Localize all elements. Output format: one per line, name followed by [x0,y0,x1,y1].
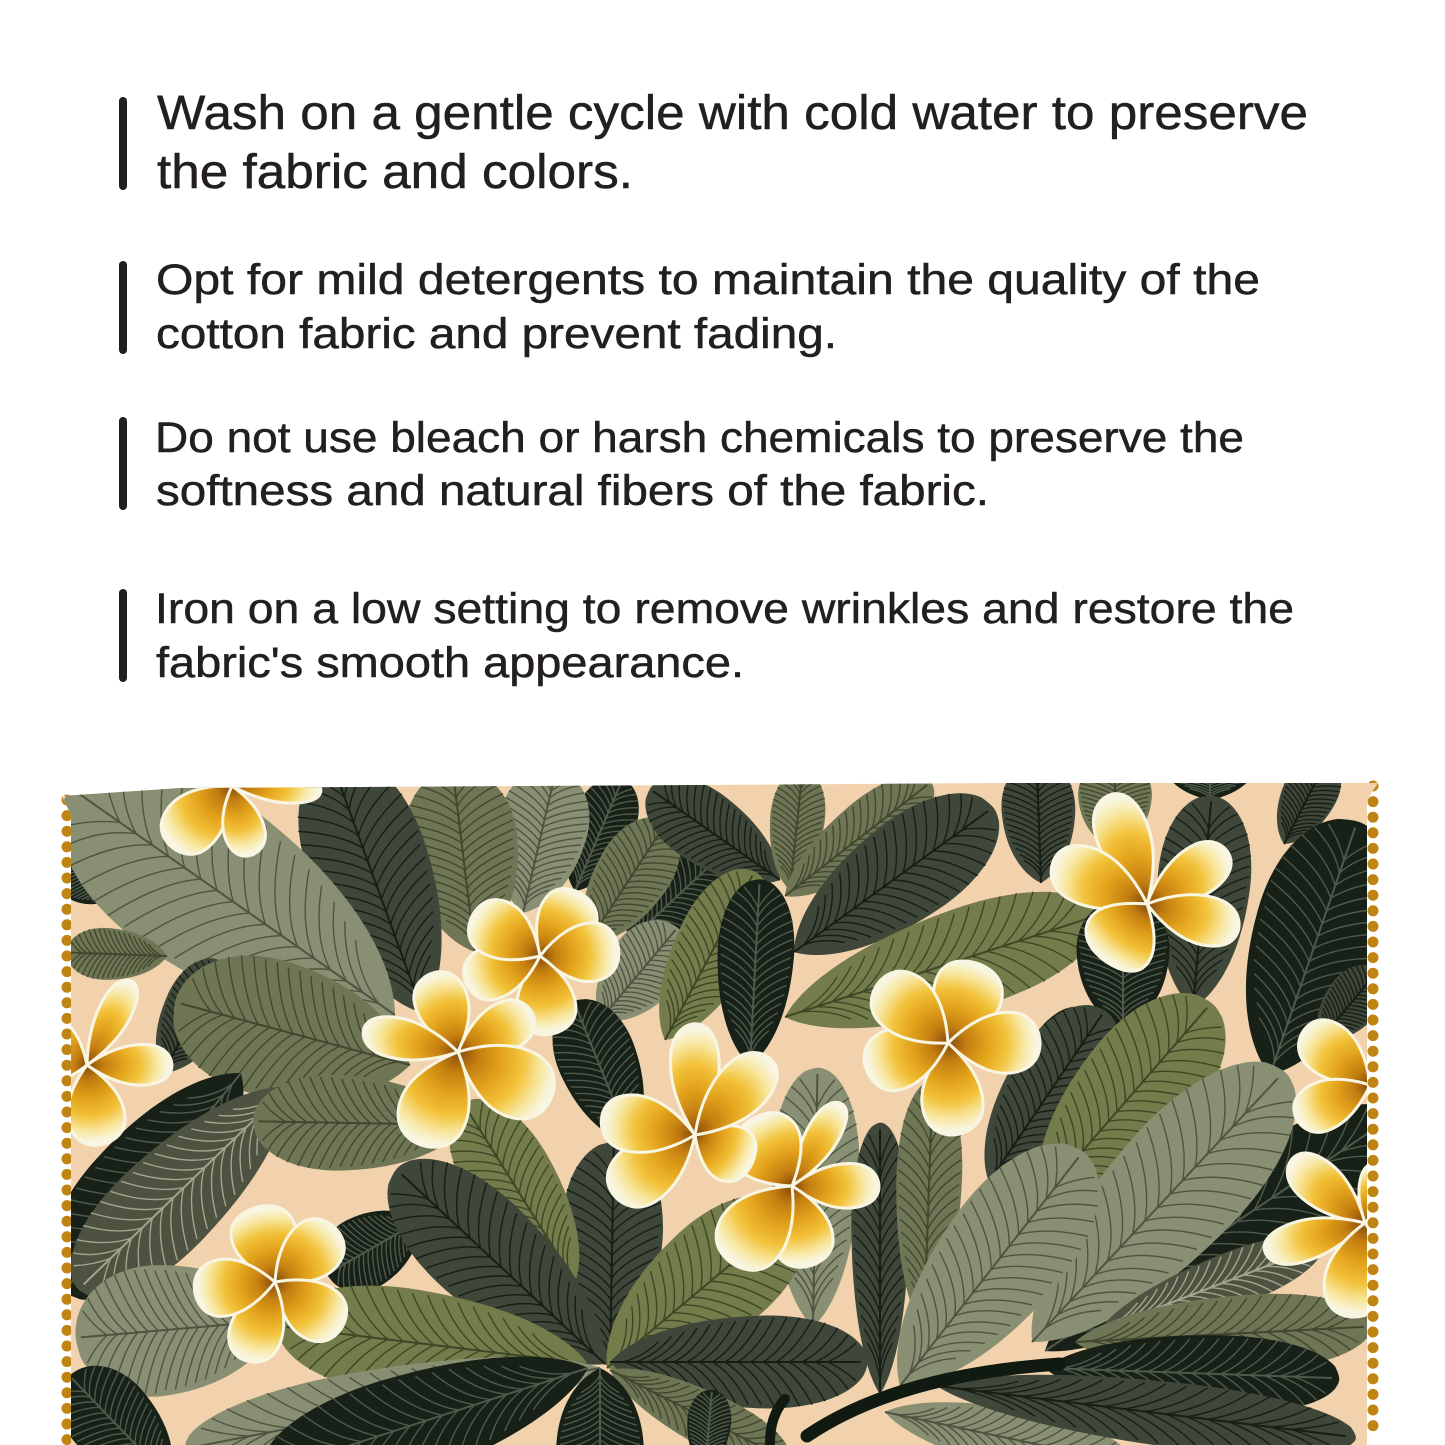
flower: centre behind [714,1100,880,1272]
flower: top right [1050,792,1241,973]
instruction: washing [119,87,1308,199]
instruction: bleach: Do not use bleach or harsh chemicals to preserve the [155,414,1244,462]
instruction: detergents [119,256,1260,358]
instruction: ironing: fabric's smooth appearance. [156,639,744,687]
dark stems [770,1364,1060,1443]
pom-pom trim [67,786,1373,1440]
flower: centre front [600,1022,779,1209]
instruction: bleach: softness and natural fibers of the fabric. [156,467,989,515]
care instructions [119,87,1308,687]
leaves [64,783,1367,1445]
flower: centre right [857,951,1040,1137]
plumeria flowers [71,787,1367,1364]
photo: floral fabric towel [62,780,1378,1445]
flower: right edge lower [1262,1152,1367,1318]
flower: large middle left [362,970,556,1149]
flower: upper middle [457,878,621,1038]
instruction: ironing: Iron on a low setting to remove wrinkles and restore the [155,585,1294,633]
flower: left edge [71,978,174,1147]
instruction: detergents: Opt for mild detergents to maintain the quality of the [156,256,1260,304]
instruction: detergents: cotton fabric and prevent fading. [156,310,837,358]
instruction: ironing [119,585,1294,687]
instruction: bleach [119,414,1244,515]
fabric base and printed pattern [62,783,1378,1445]
flower: top left [160,787,322,858]
instruction: washing: the fabric and colors. [157,146,633,199]
flower: lower left [192,1204,348,1364]
instruction: washing: Wash on a gentle cycle with cold water to preserve [157,87,1308,140]
flower: right edge upper [1292,1018,1367,1134]
